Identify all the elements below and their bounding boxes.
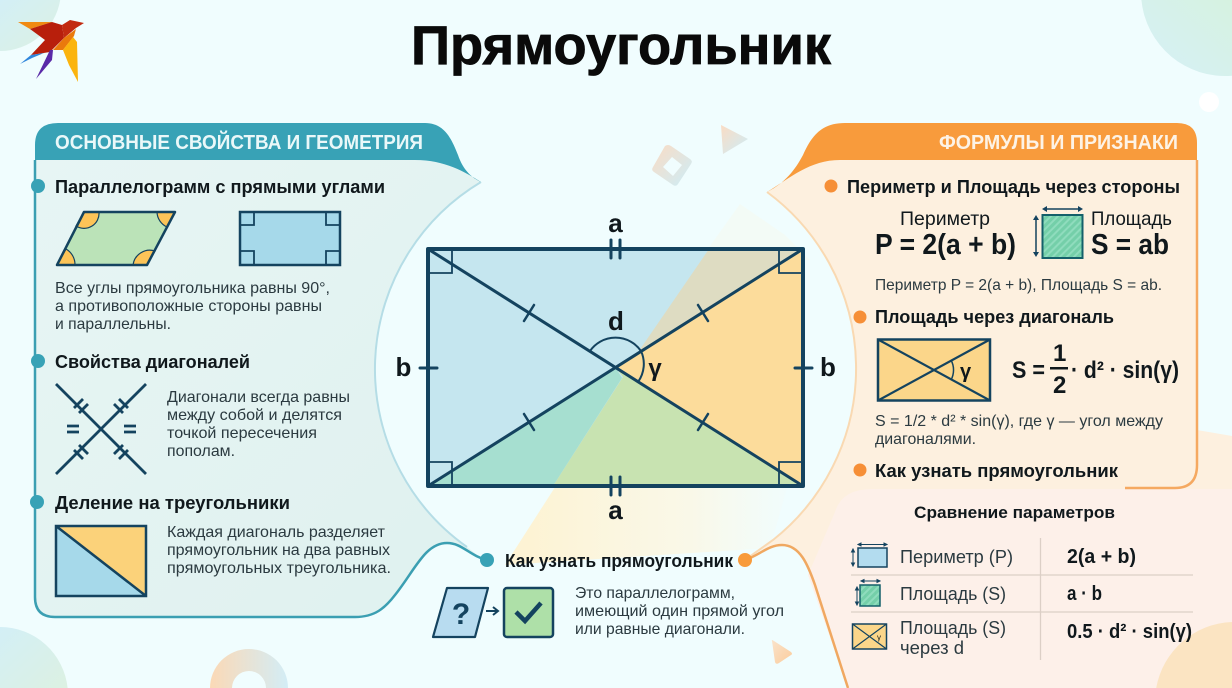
bullet teal — [480, 553, 494, 567]
icon: check box — [504, 588, 553, 637]
arrow — [486, 607, 498, 615]
bullet — [30, 495, 44, 509]
perimeter formula: P = 2(a + b) — [875, 229, 1016, 261]
main rectangle diagram — [396, 208, 836, 525]
outline — [428, 249, 803, 486]
text: triangles — [167, 524, 391, 577]
comparison panel background — [808, 489, 1232, 688]
heading: perimeter and area: Периметр и Площадь через стороны — [847, 176, 1180, 197]
label b left: b — [396, 352, 411, 382]
heading: Как узнать прямоугольник — [505, 551, 734, 571]
diagonal area formula: 2 — [1053, 372, 1066, 399]
icon: rectangle with right angles — [240, 212, 340, 265]
heading: how to recognize: Как узнать прямоугольник — [875, 460, 1119, 481]
area formula: S = ab — [1091, 229, 1169, 261]
row: area via diagonal: Площадь (S) — [900, 617, 1006, 638]
background blob: top right — [1141, 0, 1232, 76]
fill: bottom left teal — [428, 368, 622, 486]
bullet — [824, 180, 838, 192]
connector line — [745, 545, 848, 688]
text: perimeter and area: Периметр P = 2(a + b), Площадь S = ab. — [875, 277, 1162, 294]
fill: blue base — [428, 249, 803, 486]
icon: rectangle with diagonals and angle: γ — [960, 361, 972, 383]
text — [575, 585, 784, 638]
centre light wedge: upper tip — [700, 204, 810, 260]
text: triangles: прямоугольных треугольника. — [167, 560, 391, 577]
text: angles: Все углы прямоугольника равны 90°, — [55, 280, 330, 297]
text: diagonals: между собой и делятся — [167, 407, 342, 424]
diagonal area formula: 1 — [1053, 340, 1066, 367]
heading: parallelogram: Параллелограмм с прямыми углами — [55, 176, 385, 197]
panel arc — [375, 182, 481, 547]
side tick marks — [420, 240, 812, 495]
icon: parallelogram with angles — [57, 212, 175, 265]
background ring: bottom — [210, 649, 288, 688]
bullet — [31, 179, 45, 193]
row: area: Площадь (S) — [900, 583, 1006, 604]
icon: hatched square with arrows — [1033, 206, 1083, 258]
icon: rectangle with diagonals and angle — [878, 340, 990, 400]
row: area: a · b — [1067, 583, 1102, 605]
panel: main properties and geometry — [30, 123, 487, 617]
header text: ФОРМУЛЫ И ПРИЗНАКИ — [939, 132, 1178, 154]
panel header — [35, 123, 481, 182]
bullet orange — [738, 553, 752, 567]
diagonal area formula: · d² · sin(γ) — [1071, 357, 1179, 384]
text: diagonals: точкой пересечения — [167, 425, 317, 442]
text: diagonals: пополам. — [167, 443, 235, 460]
icon: question parallelogram — [433, 588, 488, 637]
decorative triangle: bottom — [772, 640, 792, 664]
icon: divided rectangle — [56, 526, 146, 596]
panel arc — [745, 192, 856, 560]
table title: Сравнение параметров — [914, 503, 1115, 522]
label gamma: γ — [648, 355, 662, 382]
fill: right triangle — [616, 249, 803, 486]
diagonal area formula — [1012, 340, 1179, 399]
background blob: bottom right — [1156, 622, 1232, 688]
bullet — [854, 310, 866, 324]
row: area via diagonal: через d — [900, 637, 964, 658]
row: area via diagonal: 0.5 · d² · sin(γ) — [1067, 621, 1192, 643]
label a bottom: a — [608, 495, 623, 525]
panel outer line — [35, 160, 487, 617]
panel body — [35, 160, 487, 617]
heading: diagonals: Свойства диагоналей — [55, 351, 250, 372]
text: angles — [55, 280, 330, 333]
text: или равные диагонали. — [575, 621, 745, 638]
panel: formulas and criteria — [745, 123, 1232, 688]
label a top: a — [608, 208, 623, 238]
text: diagonal area: диагоналями. — [875, 431, 976, 448]
right angle markers — [428, 249, 803, 486]
row: area via diagonal: γ — [877, 633, 881, 642]
heading: triangles: Деление на треугольники — [55, 492, 290, 513]
table lines — [851, 538, 1193, 660]
angle arcs — [590, 338, 644, 382]
icon: logo bird — [18, 20, 84, 82]
diagonals — [428, 249, 803, 486]
fill: bottom right green — [553, 368, 803, 486]
bullet — [31, 354, 45, 368]
row: perimeter: 2(a + b) — [1067, 546, 1136, 568]
text: triangles: Каждая диагональ разделяет — [167, 524, 386, 541]
text: angles: а противоположные стороны равны — [55, 298, 322, 315]
text: triangles: прямоугольник на два равных — [167, 542, 390, 559]
section: how to recognize a rectangle — [433, 551, 784, 638]
text: diagonals: Диагонали всегда равны — [167, 389, 350, 406]
heading: area via diagonal: Площадь через диагональ — [875, 306, 1114, 327]
diagonal tick marks — [524, 305, 708, 430]
label b right: b — [820, 352, 836, 382]
perimeter label: Периметр — [900, 208, 990, 230]
fill: top wedge — [632, 249, 803, 361]
background blob: top left — [0, 0, 60, 51]
label d: d — [608, 306, 624, 336]
background blob: bottom left — [0, 627, 68, 688]
comparison table — [851, 503, 1193, 660]
decorative triangle — [721, 125, 748, 154]
row: area via diagonal — [852, 617, 1192, 658]
text: Это параллелограмм, — [575, 585, 735, 602]
panel body — [745, 160, 1232, 688]
text: имеющий один прямой угол — [575, 603, 784, 620]
panel border — [1125, 160, 1197, 488]
row: perimeter — [852, 543, 1136, 568]
icon: crossed diagonals — [56, 384, 146, 474]
text: diagonal area: S = 1/2 * d² * sin(γ), где γ — угол между — [875, 413, 1163, 430]
background dot: top right — [1199, 92, 1219, 112]
text: diagonal area — [875, 413, 1163, 448]
title: Прямоугольник — [411, 14, 831, 76]
diagonal area formula: S = — [1012, 357, 1045, 384]
header text: ОСНОВНЫЕ СВОЙСТВА И ГЕОМЕТРИЯ — [55, 130, 423, 154]
bullet — [854, 464, 866, 476]
area label: Площадь — [1091, 208, 1172, 230]
row: area — [856, 580, 1102, 606]
decorative diamond — [652, 145, 692, 186]
panel header — [767, 123, 1197, 192]
centre light wedge — [505, 355, 825, 565]
row: perimeter: Периметр (P) — [900, 546, 1013, 567]
icon: question parallelogram: ? — [452, 598, 470, 631]
text: angles: и параллельны. — [55, 316, 171, 333]
text: diagonals — [167, 389, 350, 460]
